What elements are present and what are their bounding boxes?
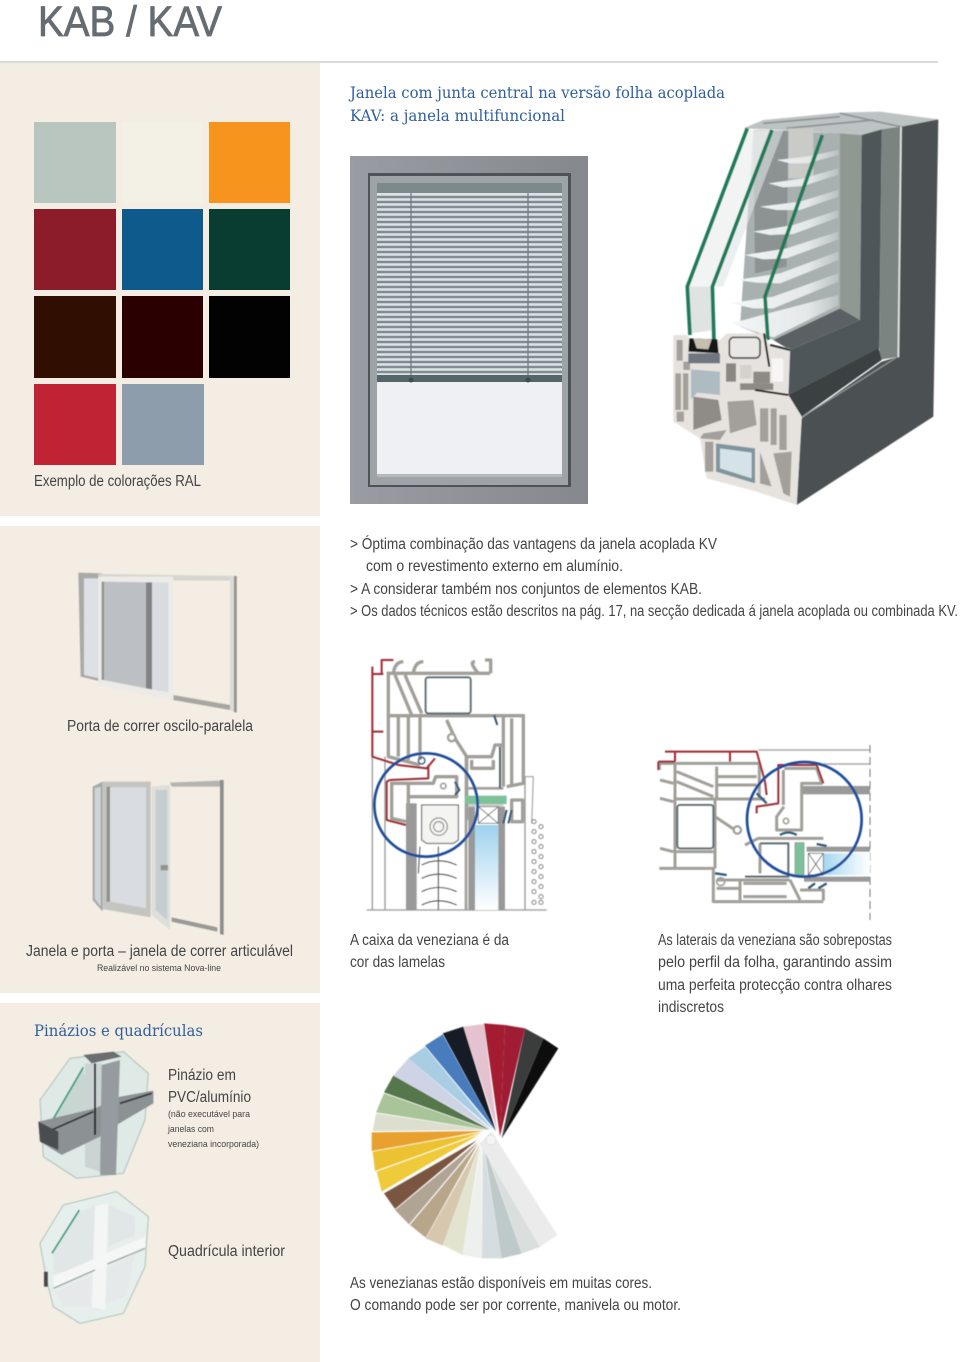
text: side profiles: uma perfeita protecção contra olhares <box>658 977 892 994</box>
blind slats <box>730 150 838 337</box>
text: blind colours: O comando pode ser por corrente, manivela ou motor. <box>350 1297 681 1314</box>
text: PVC/aluminium bar: PVC/alumínio <box>168 1089 251 1106</box>
text: side profiles <box>658 932 892 1016</box>
text: shutter box: A caixa da veneziana é da <box>350 932 509 949</box>
text: PVC/aluminium bar: veneziana incorporada) <box>168 1139 259 1150</box>
red cover profiles <box>372 660 435 825</box>
heading: glazing bars: Pinázios e quadrículas <box>34 1022 203 1040</box>
text: KAV advantages: > Óptima combinação das vantagens da janela acoplada KV <box>350 536 718 553</box>
text: shutter box: cor das lamelas <box>350 954 445 971</box>
caption: folding door: Realizável no sistema Nova-line <box>97 963 221 974</box>
heading: KAV: Janela com junta central na versão folha acoplada <box>348 84 725 102</box>
panel: RAL colours <box>0 63 320 516</box>
text: side profiles: pelo perfil da folha, garantindo assim <box>658 954 892 971</box>
text: PVC/aluminium bar <box>167 1067 259 1150</box>
image: KAV profile cross-section <box>673 112 938 505</box>
text: KAV advantages <box>350 536 958 620</box>
image: interior grid <box>40 1192 148 1323</box>
image: PVC/aluminium bar <box>38 1052 153 1178</box>
caption: RAL: Exemplo de colorações RAL <box>34 473 201 490</box>
text: PVC/aluminium bar: (não executável para <box>168 1109 251 1120</box>
image: sliding door <box>78 573 237 713</box>
text: side profiles: indiscretos <box>658 999 724 1016</box>
diagram: shutter box section <box>367 660 547 910</box>
text: side profiles: As laterais da veneziana são sobrepostas <box>658 932 892 949</box>
text: shutter box <box>350 932 509 971</box>
red cover profiles <box>658 752 823 813</box>
image: colour fan <box>372 1023 558 1258</box>
text: blind colours: As venezianas estão disponíveis em muitas cores. <box>350 1275 652 1292</box>
heading: KAV: KAV: a janela multifuncional <box>350 107 565 125</box>
text: blind colours <box>350 1275 681 1314</box>
highlight circle <box>747 762 862 877</box>
text: PVC/aluminium bar: janelas com <box>167 1124 214 1135</box>
heading: KAV <box>348 84 725 125</box>
glass panes <box>687 128 822 342</box>
text: PVC/aluminium bar: Pinázio em <box>168 1067 236 1084</box>
colour swatches <box>34 122 290 465</box>
caption: sliding door: Porta de correr oscilo-paralela <box>67 718 253 735</box>
highlight circle <box>374 753 478 857</box>
diagram: side profile section <box>658 745 870 920</box>
text: interior grid: Quadrícula interior <box>168 1243 285 1260</box>
panel: glazing bars <box>0 1003 320 1362</box>
text: KAV advantages: > A considerar também nos conjuntos de elementos KAB. <box>350 581 702 598</box>
image: folding door <box>93 780 224 935</box>
PVC profile <box>673 333 802 505</box>
text: KAV advantages: com o revestimento externo em alumínio. <box>366 558 623 575</box>
panel: door types <box>0 526 320 993</box>
caption: folding door: Janela e porta – janela de correr articulável <box>26 943 293 960</box>
image: window with integrated blind <box>350 156 588 504</box>
caption: folding door <box>26 943 293 974</box>
